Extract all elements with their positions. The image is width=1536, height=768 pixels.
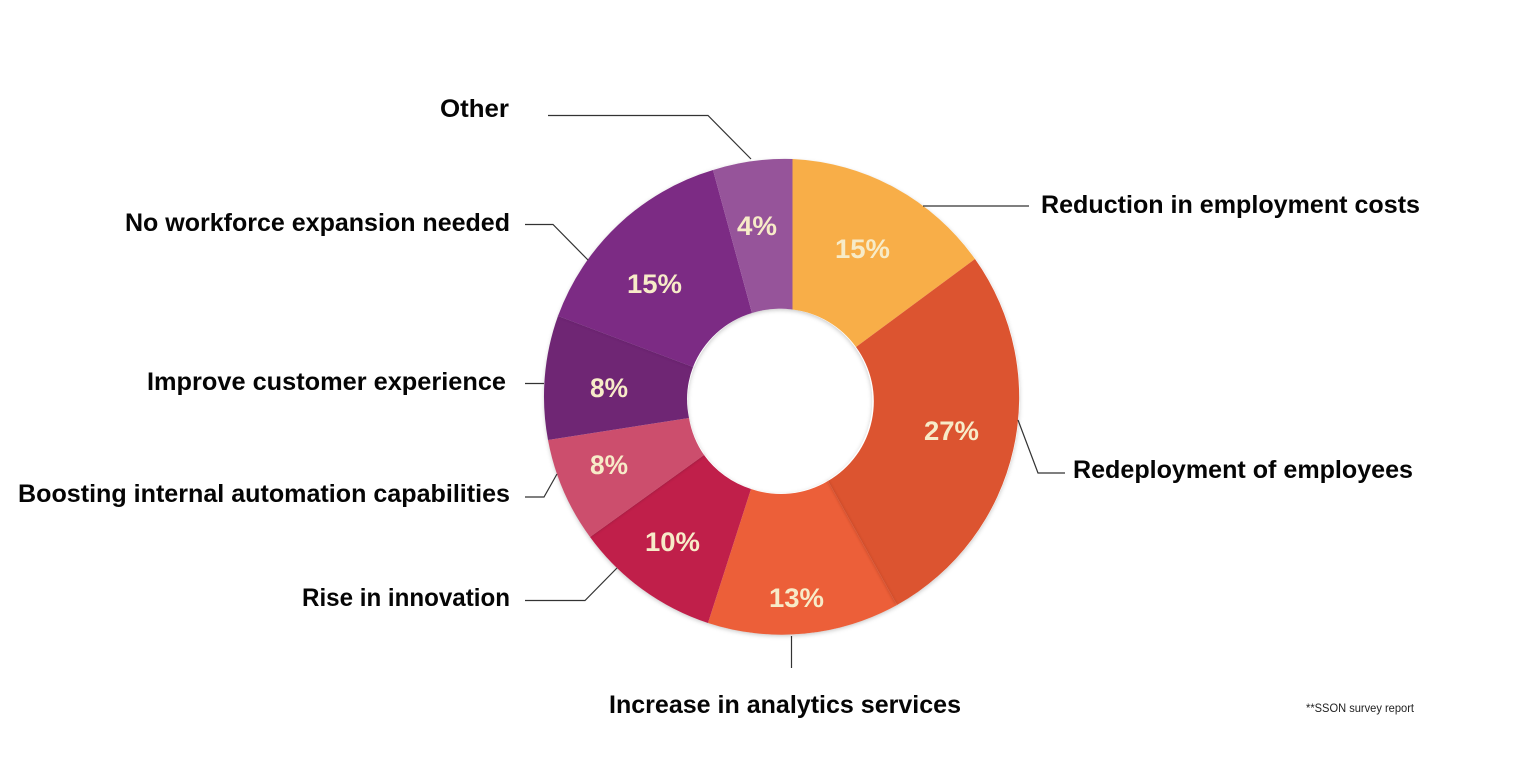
label: boosting internal automation capabilities: Boosting internal automation capabilities: [18, 480, 510, 508]
label: reduction in employment costs: Reduction in employment costs: [1041, 191, 1420, 219]
slice: no workforce expansion needed 15%: 15%: [627, 269, 682, 299]
slice: rise in innovation 10%: 10%: [645, 527, 700, 557]
leader line: boosting automation: [525, 474, 557, 497]
slice: reduction in employment costs 15%: 15%: [835, 234, 890, 264]
slice: reduction in employment costs 15%: [792, 159, 975, 347]
slice: other 4%: 4%: [737, 211, 777, 241]
leader line: other: [548, 116, 751, 159]
slice: improve customer experience 8%: 8%: [590, 373, 628, 403]
leader line: redeployment: [1018, 420, 1065, 473]
leader line: analytics services: [790, 636, 792, 668]
slice: improve customer experience 8%: [544, 316, 693, 440]
slice: increase in analytics services 13%: 13%: [769, 583, 824, 613]
leader line: rise in innovation: [525, 568, 617, 600]
leader line: no workforce expansion: [525, 224, 588, 260]
slice: redeployment of employees 27%: [828, 259, 1019, 605]
source note: **SSON survey report: [1306, 701, 1415, 715]
label: redeployment of employees: Redeployment of employees: [1073, 456, 1413, 484]
slice: boosting internal automation capabilities 8%: [548, 418, 704, 537]
label: improve customer experience: Improve customer experience: [147, 368, 506, 396]
slice: other 4%: [713, 159, 792, 313]
donut base shadow: [545, 160, 1020, 634]
label: no workforce expansion needed: No workforce expansion needed: [125, 209, 510, 237]
slice: increase in analytics services 13%: [708, 481, 897, 635]
slice: no workforce expansion needed 15%: [558, 170, 752, 367]
label: other: Other: [440, 95, 509, 123]
label: increase in analytics services: Increase in analytics services: [609, 691, 961, 719]
slice: rise in innovation 10%: [590, 455, 751, 623]
slice: boosting internal automation capabilities 8%: 8%: [590, 450, 628, 480]
slice: redeployment of employees 27%: 27%: [924, 416, 979, 446]
label: rise in innovation: Rise in innovation: [302, 584, 510, 612]
leader line: reduction in costs: [923, 205, 1029, 207]
donut chart: [544, 159, 1020, 635]
leader line: improve customer experience: [525, 382, 544, 384]
